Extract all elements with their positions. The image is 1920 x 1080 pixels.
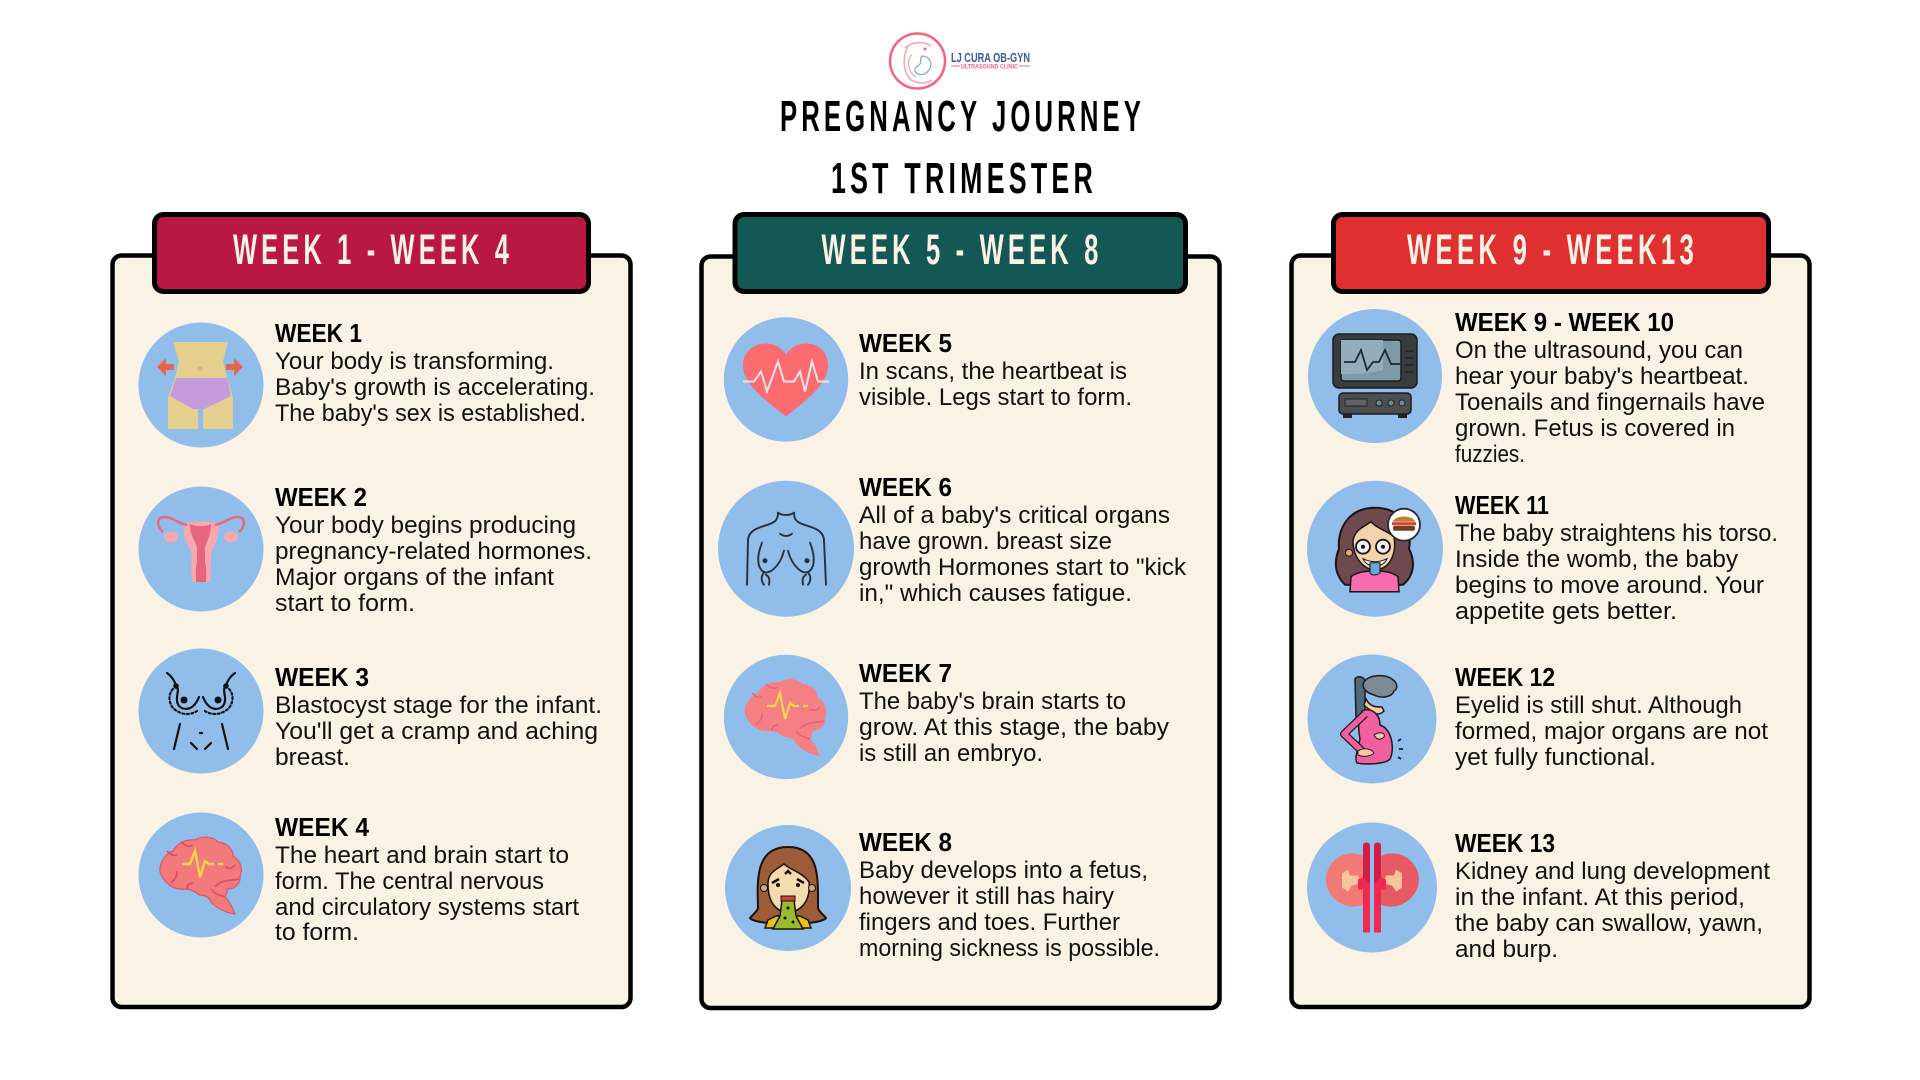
item: week 7: grow. At this stage, the baby — [859, 714, 1169, 741]
icon: kidneys — [1307, 822, 1437, 952]
item: week 1: Baby's growth is accelerating. — [275, 374, 595, 401]
item: week 7: is still an embryo. — [859, 740, 1043, 767]
item: week 12: WEEK 12 — [1455, 662, 1555, 692]
item: week 11: Inside the womb, the baby — [1455, 546, 1738, 573]
item: week 6: growth Hormones start to "kick — [859, 554, 1187, 581]
item: week 11: begins to move around. Your — [1455, 572, 1764, 599]
item: week 8: morning sickness is possible. — [859, 935, 1160, 962]
item: week 9 to week 10 — [1308, 307, 1765, 468]
item: week 2: Major organs of the infant — [275, 564, 554, 591]
item: week 12: Eyelid is still shut. Although — [1455, 692, 1742, 719]
item: week 4: to form. — [275, 919, 359, 946]
header: week 5 to week 8: WEEK 5 - WEEK 8 — [822, 226, 1102, 274]
icon: brain — [724, 655, 848, 779]
item: week 4: The heart and brain start to — [275, 842, 569, 869]
icon: hungry woman with burger bubble — [1307, 481, 1443, 617]
item: week 4 — [138, 812, 579, 946]
logo: ULTRASOUND CLINIC — [961, 64, 1018, 70]
item: week 7: WEEK 7 — [859, 658, 952, 688]
item: week 6: in," which causes fatigue. — [859, 580, 1132, 607]
item: week 11: appetite gets better. — [1455, 598, 1677, 625]
icon: woman with morning sickness — [725, 825, 851, 951]
icon: heart with pulse — [724, 317, 848, 442]
item: week 13 — [1307, 822, 1770, 963]
item: week 2: Your body begins producing — [275, 512, 576, 539]
item: week 9 to week 10: On the ultrasound, you can — [1455, 337, 1743, 364]
item: week 6: All of a baby's critical organs — [859, 502, 1170, 529]
header: week 9 to week 13: WEEK 9 - WEEK13 — [1407, 226, 1698, 274]
icon: pregnant woman side view — [1308, 654, 1436, 784]
item: week 2 — [138, 482, 592, 617]
panel: week 9 to week 13 — [1292, 214, 1810, 1007]
icon: ultrasound monitor — [1308, 309, 1442, 443]
item: week 5: In scans, the heartbeat is — [859, 358, 1127, 385]
item: week 1 — [138, 318, 595, 448]
item: week 8: however it still has hairy — [859, 883, 1114, 910]
item: week 9 to week 10: fuzzies. — [1455, 441, 1525, 468]
title: 1ST TRIMESTER — [831, 154, 1097, 203]
icon: brain — [138, 812, 264, 938]
item: week 4: form. The central nervous — [275, 868, 544, 895]
item: week 5 — [724, 317, 1132, 442]
header: week 5 to week 8 — [735, 214, 1186, 292]
item: week 6 — [718, 472, 1187, 617]
item: week 8: fingers and toes. Further — [859, 909, 1120, 936]
logo: LJ CURA OB-GYN — [951, 51, 1030, 65]
item: week 3: breast. — [275, 744, 350, 771]
item: week 9 to week 10: WEEK 9 - WEEK 10 — [1455, 307, 1674, 337]
item: week 6: have grown. breast size — [859, 528, 1112, 555]
panel: week 5 to week 8 — [702, 214, 1220, 1008]
panel: week 1 to week 4 — [112, 214, 630, 1007]
item: week 13: WEEK 13 — [1455, 828, 1555, 858]
item: week 13: in the infant. At this period, — [1455, 884, 1745, 911]
item: week 13: and burp. — [1455, 936, 1558, 963]
item: week 1: Your body is transforming. — [275, 348, 554, 375]
item: week 2: pregnancy-related hormones. — [275, 538, 592, 565]
item: week 3 — [138, 648, 602, 774]
item: week 9 to week 10: grown. Fetus is covered in — [1455, 415, 1735, 442]
item: week 2: WEEK 2 — [275, 482, 367, 512]
item: week 3: Blastocyst stage for the infant. — [275, 692, 602, 719]
item: week 1: The baby's sex is established. — [275, 400, 586, 427]
item: week 7 — [724, 655, 1169, 779]
item: week 3: WEEK 3 — [275, 662, 369, 692]
icon: torso with surgical marks — [138, 648, 264, 774]
item: week 11: WEEK 11 — [1455, 490, 1549, 520]
item: week 8: Baby develops into a fetus, — [859, 857, 1148, 884]
item: week 1: WEEK 1 — [275, 318, 362, 348]
icon: hips and waist — [138, 322, 264, 448]
item: week 5: visible. Legs start to form. — [859, 384, 1132, 411]
logo — [890, 34, 1030, 88]
item: week 6: WEEK 6 — [859, 472, 952, 502]
item: week 9 to week 10: hear your baby's heartbeat. — [1455, 363, 1749, 390]
item: week 2: start to form. — [275, 590, 415, 617]
item: week 8 — [725, 825, 1160, 962]
item: week 4: WEEK 4 — [275, 812, 370, 842]
item: week 7: The baby's brain starts to — [859, 688, 1126, 715]
icon: chest outline — [718, 481, 854, 617]
header: week 1 to week 4 — [154, 214, 588, 292]
title: PREGNANCY JOURNEY — [780, 92, 1145, 141]
item: week 5: WEEK 5 — [859, 328, 952, 358]
item: week 11: The baby straightens his torso. — [1455, 520, 1778, 547]
item: week 12 — [1308, 654, 1768, 784]
item: week 12: formed, major organs are not — [1455, 718, 1768, 745]
header: week 9 to week 13 — [1334, 214, 1768, 292]
item: week 9 to week 10: Toenails and fingernails have — [1455, 389, 1765, 416]
item: week 3: You'll get a cramp and aching — [275, 718, 598, 745]
title — [780, 92, 1145, 203]
item: week 4: and circulatory systems start — [275, 894, 579, 921]
item: week 11 — [1307, 481, 1778, 625]
icon: uterus — [138, 486, 264, 612]
item: week 13: Kidney and lung development — [1455, 858, 1770, 885]
item: week 13: the baby can swallow, yawn, — [1455, 910, 1763, 937]
header: week 1 to week 4: WEEK 1 - WEEK 4 — [233, 226, 513, 274]
item: week 8: WEEK 8 — [859, 827, 952, 857]
item: week 12: yet fully functional. — [1455, 744, 1656, 771]
